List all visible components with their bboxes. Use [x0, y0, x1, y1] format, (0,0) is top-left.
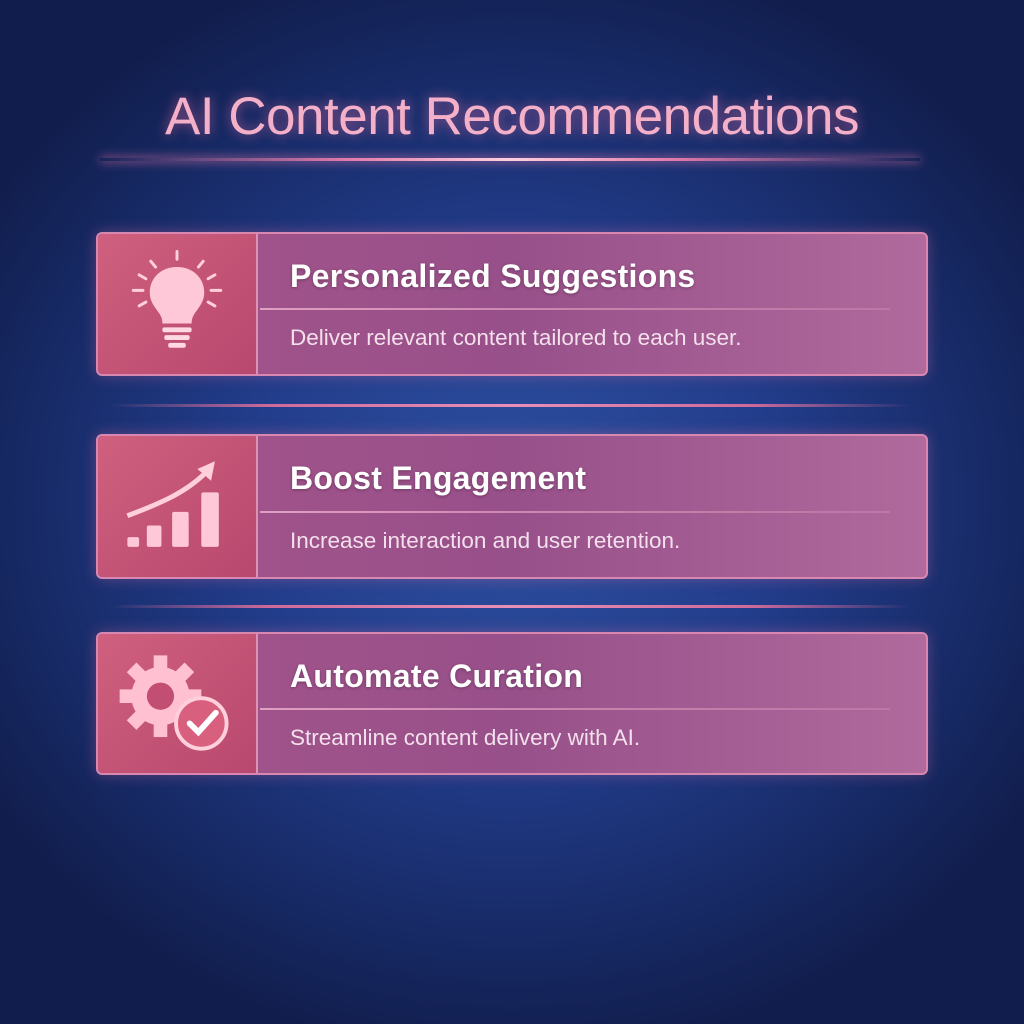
description: Increase interaction and user retention.	[290, 528, 680, 553]
title: AI Content Recommendations	[165, 87, 859, 146]
description: Streamline content delivery with AI.	[290, 725, 640, 750]
heading: Boost Engagement	[290, 460, 586, 496]
description: Deliver relevant content tailored to each user.	[290, 325, 742, 350]
icon: bar chart	[98, 436, 258, 577]
heading: Automate Curation	[290, 658, 583, 694]
card: personalized suggestions	[96, 232, 928, 376]
card: automate curation	[96, 632, 928, 775]
card: boost engagement	[96, 434, 928, 579]
heading: Personalized Suggestions	[290, 258, 696, 294]
icon: lightbulb	[98, 234, 258, 374]
icon: gear with check	[98, 634, 258, 773]
